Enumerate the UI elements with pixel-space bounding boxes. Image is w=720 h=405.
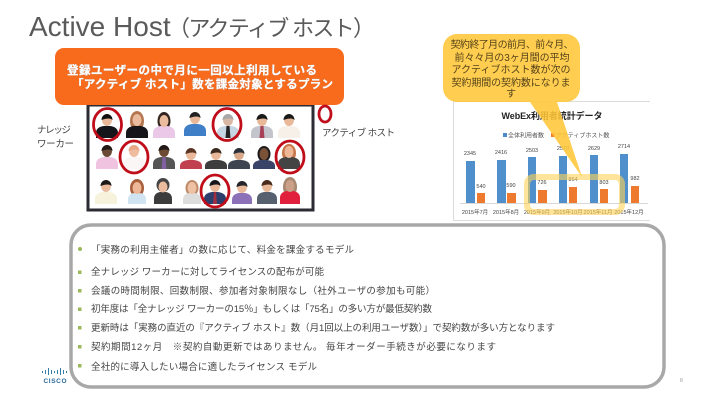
axis xyxy=(460,202,648,204)
callout text: す xyxy=(506,88,516,100)
bullet text: 初年度は「全ナレッジ ワーカーの15％」もしくは「75名」の多い方が最低契約数 xyxy=(91,303,432,315)
value labels xyxy=(464,144,640,190)
panel: plan details xyxy=(71,225,664,387)
bars: active hosts xyxy=(477,186,639,203)
label: knowledge worker: ワーカー xyxy=(37,139,74,150)
month labels: 2015年11月 xyxy=(584,208,612,216)
title: （アクティブ ホスト） xyxy=(168,16,375,41)
value labels: 2579 xyxy=(557,146,569,152)
chart legend xyxy=(503,132,609,140)
title xyxy=(29,11,375,42)
bullet text: 更新時は「実務の直近の『アクティブ ホスト』数（月1回以上の利用ユーザ数）」で契約数が多い方となります xyxy=(91,322,555,334)
value labels: 2345 xyxy=(464,151,476,157)
month labels xyxy=(462,208,644,216)
label: knowledge worker xyxy=(37,125,74,150)
logo: cisco: CISCO xyxy=(44,378,66,385)
chart title: WebEx利用者統計データ xyxy=(502,110,602,121)
logo: cisco xyxy=(42,368,66,385)
banner text xyxy=(67,63,333,91)
grid frame xyxy=(88,105,313,210)
legend: active host xyxy=(319,106,395,139)
bullets xyxy=(78,247,82,368)
bullet text: 全ナレッジ ワーカーに対してライセンスの配布が可能 xyxy=(91,266,324,278)
chart frame xyxy=(454,102,650,220)
people row 3 xyxy=(95,177,300,204)
people row 2 xyxy=(96,144,300,169)
value labels: 2714 xyxy=(618,144,630,150)
month labels: 2015年10月 xyxy=(553,208,583,216)
panel: user grid xyxy=(88,105,313,210)
legend: active host: アクティブ ホスト xyxy=(322,127,395,139)
callout text xyxy=(450,38,574,100)
bullet text: 「実務の利用主催者」の数に応じて、料金を課金するモデル xyxy=(91,244,354,256)
value labels: 803 xyxy=(599,180,609,186)
label: knowledge worker: ナレッジ xyxy=(37,125,71,136)
chart legend: アクティブホスト数 xyxy=(556,132,609,140)
banner text: 「アクティブ ホスト」数を課金対象とするプラン xyxy=(72,77,333,91)
value labels: 540 xyxy=(476,184,486,190)
value labels: 2416 xyxy=(495,150,507,156)
active host markers xyxy=(94,108,304,207)
bars: total xyxy=(466,154,628,203)
value labels: 864 xyxy=(568,177,578,183)
callout text: 契約期間の契約数になりま xyxy=(452,76,570,89)
bullet text: 全社的に導入したい場合に適したライセンス モデル xyxy=(91,361,317,373)
callout text: 契約終了月の前月、前々月、 xyxy=(450,38,574,51)
callout text: アクティブホスト数が次の xyxy=(452,63,570,76)
chart: WebEx usage statistics xyxy=(454,102,650,220)
callout text: 前々々月の3ヶ月間の平均 xyxy=(454,51,570,64)
people row 1 xyxy=(96,111,300,138)
panel: orange banner xyxy=(55,48,344,105)
month labels: 2015年12月 xyxy=(614,208,644,216)
month labels: 2015年7月 xyxy=(462,208,488,216)
month labels: 2015年9月 xyxy=(524,208,550,216)
value labels: 590 xyxy=(506,183,516,189)
value labels: 726 xyxy=(537,180,547,186)
value labels: 2629 xyxy=(588,146,600,152)
value labels: 982 xyxy=(630,176,640,182)
highlight box xyxy=(527,177,622,212)
bullet text xyxy=(91,244,555,373)
bullet text: 契約期間12ヶ月 ※契約自動更新ではありません。 毎年オーダー手続きが必要になります xyxy=(91,341,496,353)
value labels: 2503 xyxy=(526,148,538,154)
page number: 8 xyxy=(680,378,683,384)
month labels: 2015年8月 xyxy=(493,208,519,216)
chart legend: 全体利用者数 xyxy=(508,132,544,140)
title: Active Host xyxy=(29,11,171,42)
callout: contract calculation xyxy=(443,34,582,177)
bullet text: 会議の時間制限、回数制限、参加者対象制限なし（社外ユーザの参加も可能） xyxy=(91,285,435,297)
banner text: 登録ユーザーの中で月に一回以上利用している xyxy=(67,63,317,77)
